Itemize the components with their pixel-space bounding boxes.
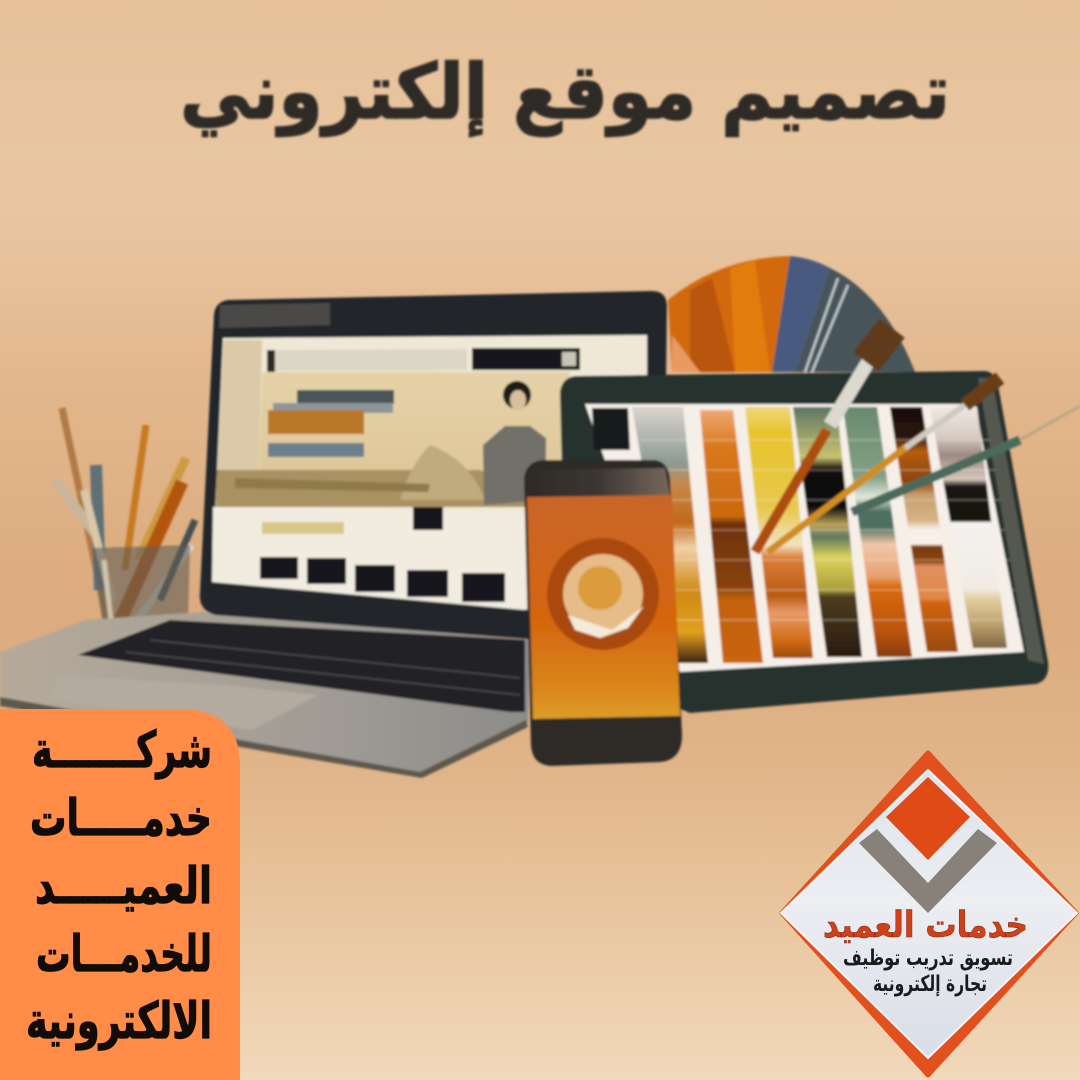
phone xyxy=(524,460,682,766)
illustration: devices and design tools xyxy=(0,256,1080,778)
icon: colour wheel xyxy=(668,256,915,372)
logo name: خدمات العميد xyxy=(823,905,1028,946)
thumbnails xyxy=(260,507,505,602)
logo red square xyxy=(886,777,970,860)
phone screen xyxy=(527,495,680,719)
laptop screen xyxy=(212,335,647,610)
logo tagline: تجارة إلكترونية xyxy=(873,972,987,997)
phone body xyxy=(524,460,682,766)
company name text xyxy=(26,721,212,1051)
icon: paint brushes xyxy=(755,328,1080,552)
nav button xyxy=(472,348,580,370)
navigation bar xyxy=(270,349,467,371)
logo chevron xyxy=(859,829,997,913)
tablet xyxy=(560,371,1048,713)
title: تصميم موقع إلكتروني xyxy=(180,47,950,137)
logo tagline: تسويق تدريب توظيف xyxy=(843,946,1013,971)
logo tagline xyxy=(843,946,1013,997)
tablet screen xyxy=(585,404,1024,672)
tablet frame xyxy=(560,371,1048,713)
laptop screen frame xyxy=(200,291,667,640)
logo: Al-Ameed services xyxy=(781,753,1077,1075)
laptop base xyxy=(0,612,530,776)
hero bars xyxy=(297,390,394,404)
company name text: العميـــــد xyxy=(35,857,212,915)
colour swatches xyxy=(632,407,708,663)
trackpad xyxy=(50,676,318,730)
app badge xyxy=(547,538,659,650)
presenter xyxy=(483,381,546,505)
company name text: للخدمـــات xyxy=(36,925,212,983)
company name text: شركـــــــة xyxy=(32,721,212,780)
company name text: خدمـــــات xyxy=(30,789,212,847)
company name text: الالكترونية xyxy=(26,992,212,1051)
hero image xyxy=(258,372,570,507)
panel: company name xyxy=(0,709,240,1080)
hero ground band xyxy=(216,470,545,507)
page lower section xyxy=(212,507,525,610)
icon: pencil cup xyxy=(55,408,195,634)
laptop xyxy=(0,291,667,778)
keyboard xyxy=(78,620,525,712)
logo inner diamond xyxy=(781,770,1077,1058)
